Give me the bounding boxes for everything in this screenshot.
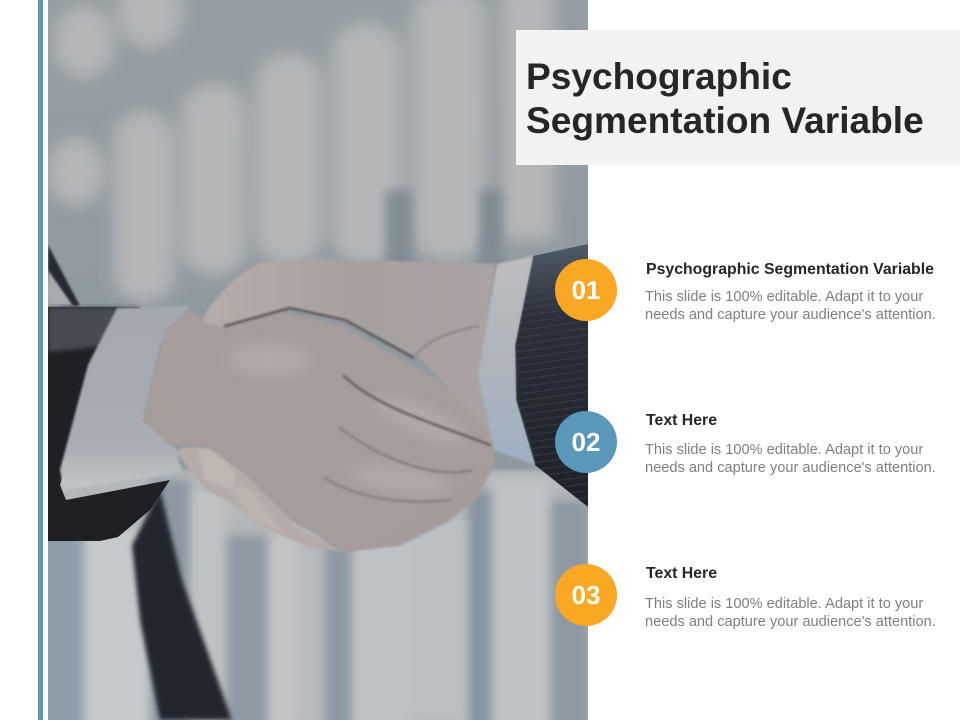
right jacket sleeve — [515, 244, 588, 507]
clasping hand — [143, 308, 495, 552]
item 1 heading: Psychographic Segmentation Variable — [646, 261, 934, 278]
finger shading — [225, 308, 490, 502]
left sleeve and tie — [48, 245, 232, 720]
item 1 text: needs and capture your audience's attention. — [645, 307, 936, 323]
item 3 text — [645, 596, 936, 630]
item 2 text: This slide is 100% editable. Adapt it to your — [645, 442, 923, 458]
title: Psychographic — [526, 55, 792, 97]
item 2 heading: Text Here — [646, 412, 717, 429]
item 3 heading: Text Here — [646, 565, 717, 582]
right shirt cuff — [478, 256, 535, 465]
photo background — [40, 0, 600, 720]
number badge 02: 02 — [572, 427, 600, 457]
number badge 01 — [555, 259, 617, 321]
item 3 text: This slide is 100% editable. Adapt it to your — [645, 596, 923, 612]
item 2 text: needs and capture your audience's attention. — [645, 460, 936, 476]
title — [526, 55, 924, 141]
number badge 01: 01 — [572, 275, 600, 305]
lower fingers — [176, 446, 345, 552]
item 1 text: This slide is 100% editable. Adapt it to your — [645, 289, 923, 305]
right hand — [203, 258, 495, 432]
number badge 02 — [555, 411, 617, 473]
number badge 03 — [555, 564, 617, 626]
left shirt cuff — [60, 306, 190, 490]
item 3 text: needs and capture your audience's attention. — [645, 614, 936, 630]
hand highlights — [230, 344, 471, 499]
title: Segmentation Variable — [526, 99, 924, 141]
item 2 text — [645, 442, 936, 476]
photo: handshake — [48, 0, 588, 720]
title panel — [516, 30, 960, 165]
number badge 03: 03 — [572, 580, 600, 610]
accent strip — [38, 0, 43, 720]
item 1 text — [645, 289, 936, 323]
